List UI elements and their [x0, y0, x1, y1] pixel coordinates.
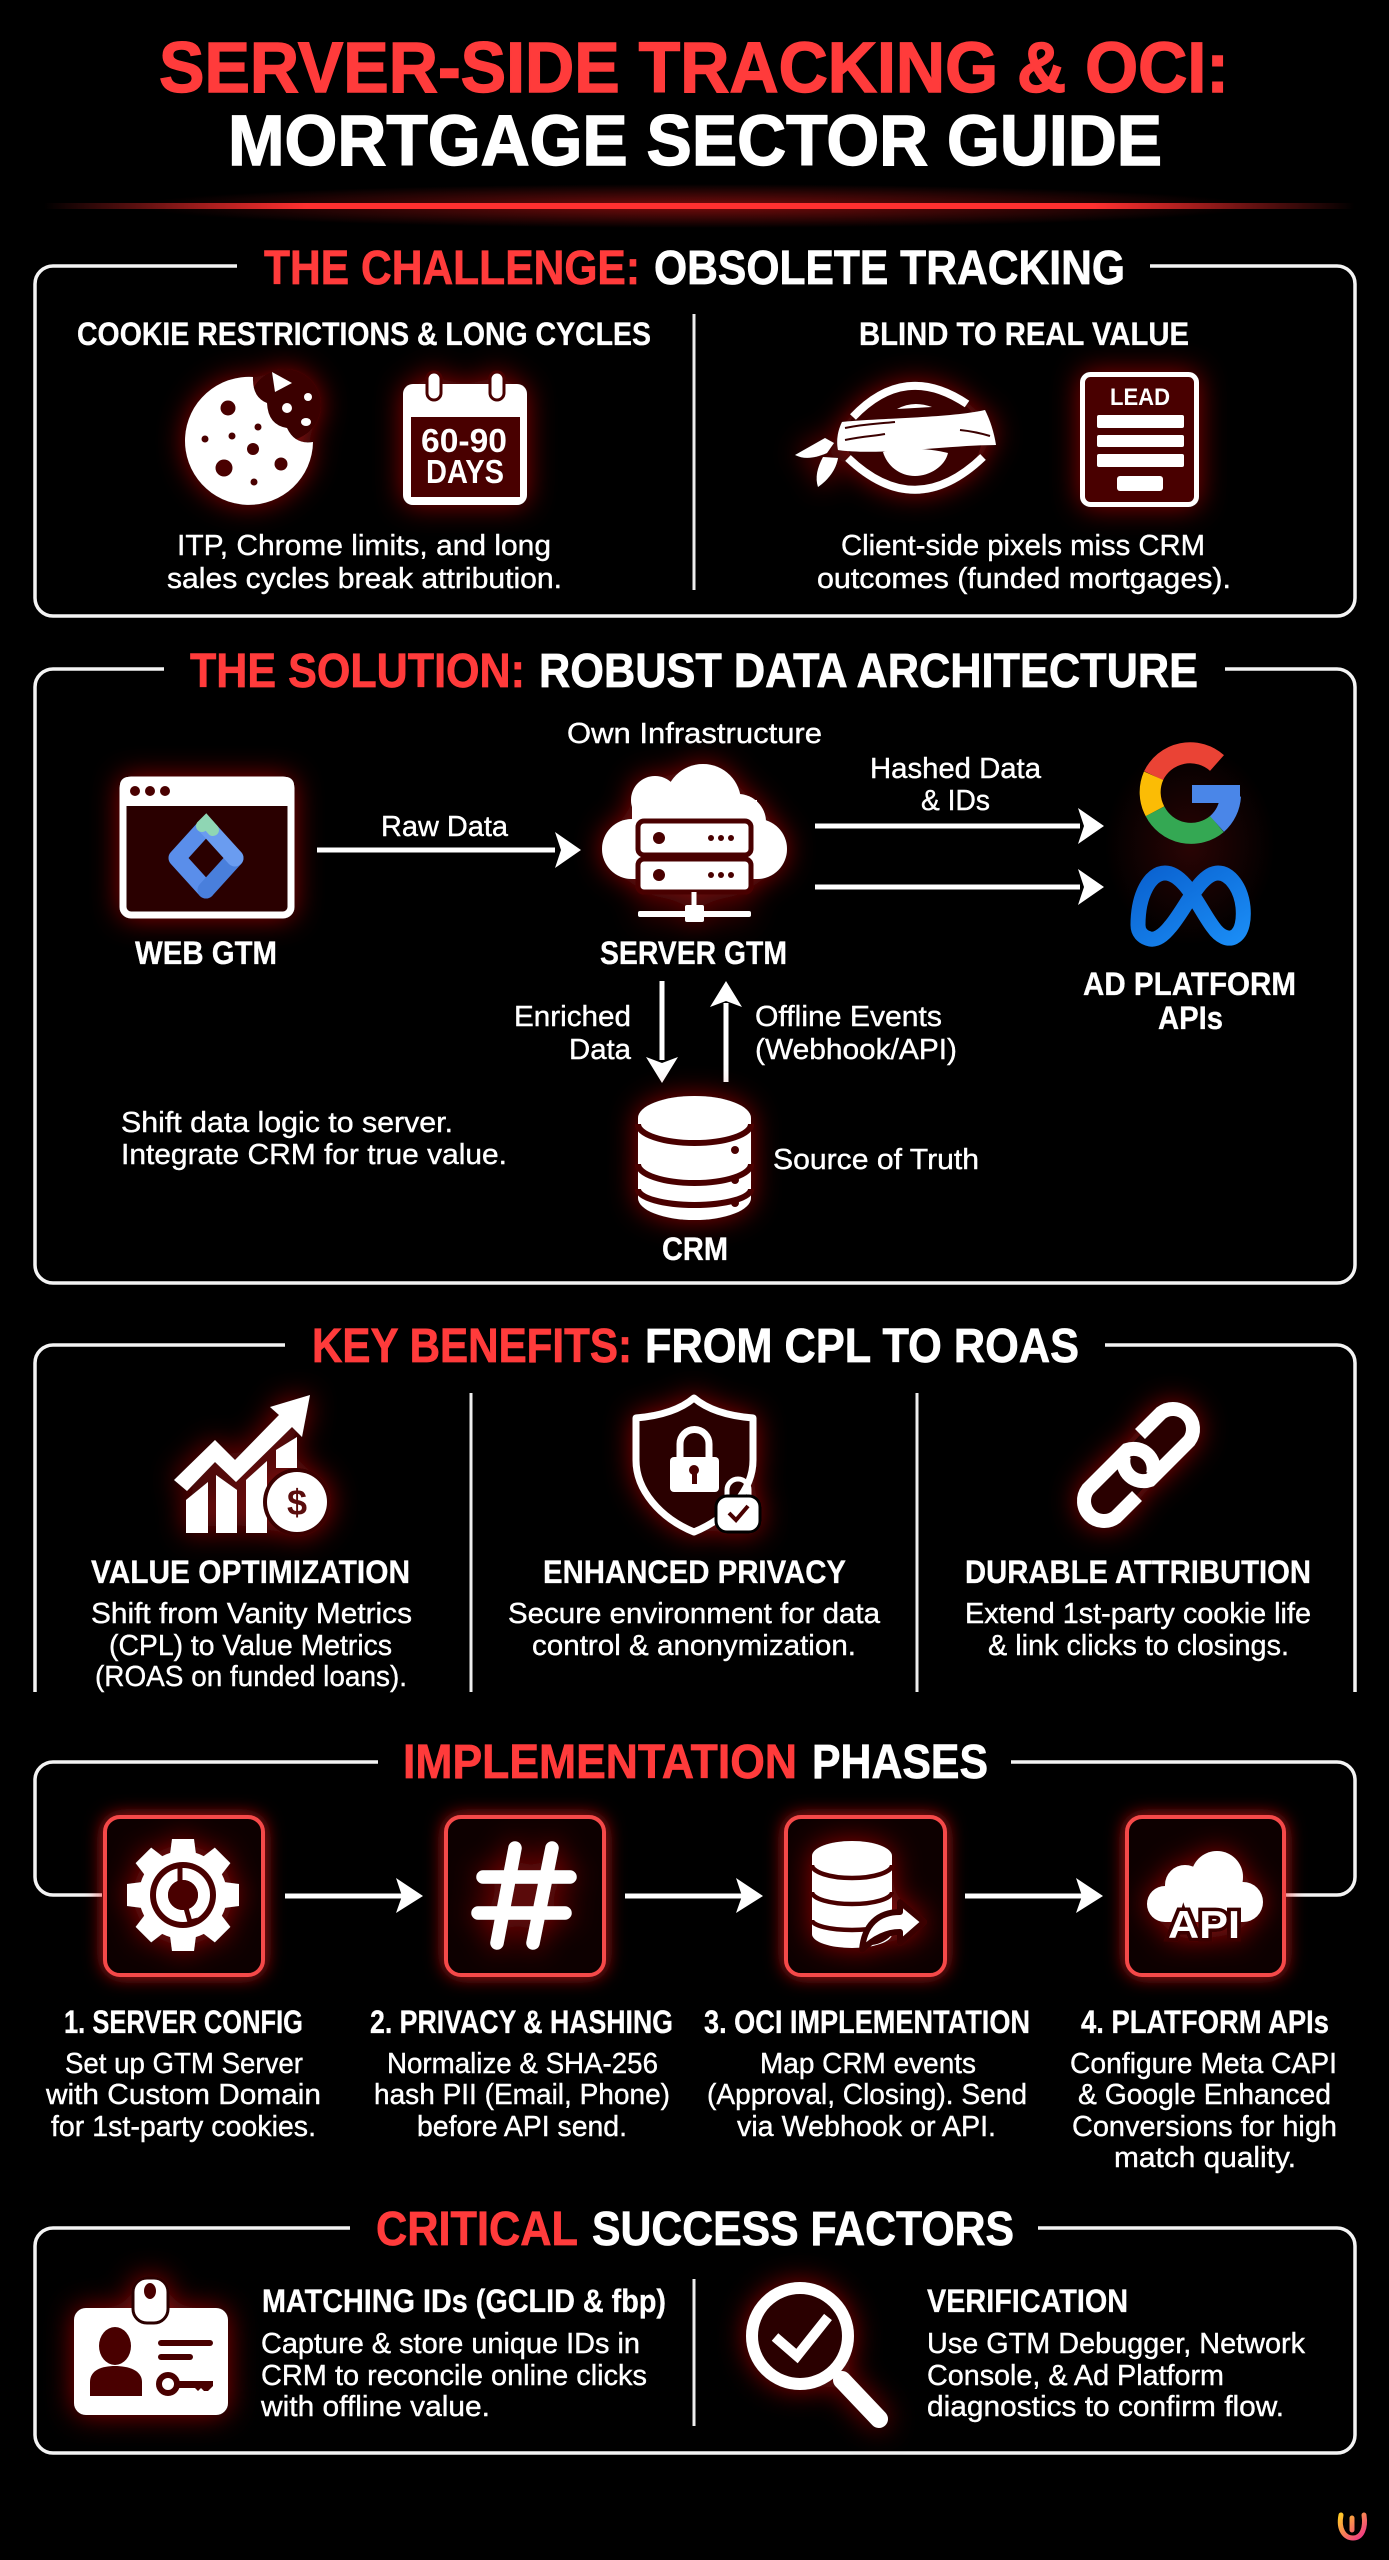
heading: critical success factors — [376, 2203, 1014, 2256]
text: phase 2: hash PII (Email, Phone) — [374, 2079, 670, 2111]
icon: gear — [127, 1839, 239, 1951]
label: web gtm: WEB GTM — [135, 935, 277, 971]
label: source of truth: Source of Truth — [773, 1144, 979, 1176]
icon: crm database — [638, 1096, 751, 1220]
text: durable attribution: DURABLE ATTRIBUTION — [965, 1554, 1311, 1590]
icon: id badge with key — [74, 2278, 228, 2415]
arrow: offline events: Offline Events — [755, 1001, 942, 1033]
text: challenge right description: outcomes (funded mortgages). — [817, 563, 1231, 595]
text: phase 4: & Google Enhanced — [1078, 2079, 1331, 2111]
arrow: enriched data — [514, 981, 678, 1083]
icon: blindfolded eye — [795, 386, 996, 490]
text: durable attribution: Extend 1st-party cookie life — [965, 1598, 1311, 1630]
text: challenge right description: Client-side pixels miss CRM — [841, 530, 1205, 562]
title: SERVER-SIDE TRACKING & OCI: — [159, 29, 1229, 108]
label: own infrastructure: Own Infrastructure — [567, 718, 822, 750]
heading: critical success factors: CRITICAL — [376, 2203, 578, 2256]
text: value optimization: (ROAS on funded loans). — [95, 1661, 407, 1693]
label: ad platform apis — [1083, 966, 1296, 1036]
text: challenge right description — [817, 530, 1231, 595]
label: ad platform apis: APIs — [1158, 1000, 1223, 1036]
arrow: phase 1 to 2 — [285, 1878, 423, 1913]
icon: meta logo — [1138, 873, 1243, 939]
text: phase 2: before API send. — [417, 2111, 627, 2143]
text: matching ids — [260, 2283, 666, 2423]
text: matching ids: MATCHING IDs (GCLID & fbp) — [262, 2283, 666, 2319]
arrow: hashed data to google — [815, 753, 1104, 844]
text: phase 1: 1. SERVER CONFIG — [64, 2004, 303, 2040]
text: challenge left description: sales cycles break attribution. — [167, 563, 562, 595]
arrow: raw data — [317, 811, 581, 868]
icon: privacy shield — [636, 1398, 760, 1532]
text: phase 3 — [704, 2004, 1030, 2143]
text: matching ids: CRM to reconcile online clicks — [261, 2360, 647, 2392]
heading: the challenge: THE CHALLENGE: — [264, 242, 640, 295]
arrow: data to meta — [815, 869, 1104, 905]
arrow: hashed data to google: Hashed Data — [870, 753, 1042, 785]
heading: the solution: ROBUST DATA ARCHITECTURE — [539, 645, 1198, 698]
text: phase 3: (Approval, Closing). Send — [707, 2079, 1027, 2111]
text: enhanced privacy: ENHANCED PRIVACY — [543, 1554, 846, 1590]
heading: the solution: THE SOLUTION: — [190, 645, 525, 698]
text: phase 1 — [45, 2004, 321, 2143]
icon: api cloud: API — [1168, 1904, 1240, 1947]
arrow: raw data: Raw Data — [381, 811, 509, 843]
arrow: offline events — [710, 981, 957, 1082]
icon: value growth chart — [174, 1395, 331, 1536]
text: phase 1: with Custom Domain — [45, 2079, 321, 2111]
icon: lead form — [1082, 374, 1196, 504]
text: value optimization — [91, 1554, 412, 1693]
icon: bitten cookie — [185, 369, 321, 505]
title — [159, 29, 1229, 181]
heading: the solution — [190, 645, 1198, 698]
text: shift data logic: Integrate CRM for true value. — [121, 1139, 507, 1171]
icon: chain link — [1084, 1409, 1193, 1521]
text: verification: VERIFICATION — [927, 2283, 1128, 2319]
icon: calendar 60-90 days — [403, 372, 527, 505]
text: phase 4: match quality. — [1114, 2142, 1296, 2174]
text: phase 1: for 1st-party cookies. — [51, 2111, 316, 2143]
text: challenge left description: ITP, Chrome limits, and long — [177, 530, 551, 562]
text: phase 4: 4. PLATFORM APIs — [1081, 2004, 1329, 2040]
arrow: offline events: (Webhook/API) — [755, 1034, 957, 1066]
icon: lead form: LEAD — [1110, 384, 1170, 411]
text: verification: Use GTM Debugger, Network — [927, 2328, 1305, 2360]
text: phase 2 — [370, 2004, 673, 2143]
text: verification: Console, & Ad Platform — [927, 2360, 1224, 2392]
subheading: blind to real value: BLIND TO REAL VALUE — [859, 316, 1189, 352]
icon: database with share arrow — [812, 1841, 924, 1950]
text: matching ids: Capture & store unique IDs in — [261, 2328, 640, 2360]
text: matching ids: with offline value. — [260, 2391, 490, 2423]
phase box: privacy and hashing — [446, 1817, 604, 1975]
heading: implementation phases: IMPLEMENTATION — [403, 1736, 797, 1789]
text: value optimization: Shift from Vanity Metrics — [91, 1598, 412, 1630]
text: phase 4: Configure Meta CAPI — [1070, 2048, 1337, 2080]
heading: key benefits: KEY BENEFITS: — [312, 1320, 632, 1373]
phase box: platform apis — [1127, 1817, 1284, 1975]
panel: implementation phases — [35, 1736, 1355, 2174]
heading: the challenge — [264, 242, 1125, 295]
label: server gtm: SERVER GTM — [600, 935, 787, 971]
panel: the solution — [35, 645, 1355, 1283]
icon: google logo — [1105, 745, 1275, 945]
icon: magnifier with check — [752, 2288, 879, 2419]
label: crm: CRM — [662, 1231, 728, 1267]
text: shift data logic: Shift data logic to server. — [121, 1107, 453, 1139]
text: enhanced privacy — [508, 1554, 881, 1662]
icon: calendar 60-90 days: DAYS — [426, 453, 504, 490]
text: enhanced privacy: control & anonymization. — [532, 1630, 856, 1662]
text: phase 3: 3. OCI IMPLEMENTATION — [704, 2004, 1030, 2040]
arrow: enriched data: Data — [569, 1034, 632, 1066]
text: phase 4: Conversions for high — [1072, 2111, 1337, 2143]
arrow: phase 3 to 4 — [965, 1878, 1103, 1913]
text: phase 2: Normalize & SHA-256 — [387, 2048, 658, 2080]
text: enhanced privacy: Secure environment for data — [508, 1598, 881, 1630]
text: phase 4 — [1070, 2004, 1337, 2174]
panel: critical success factors — [35, 2203, 1355, 2453]
text: phase 3: via Webhook or API. — [737, 2111, 996, 2143]
icon: calendar 60-90 days: 60-90 — [421, 422, 507, 459]
subheading: cookie restrictions: COOKIE RESTRICTIONS & LONG CYCLES — [77, 316, 651, 352]
text: phase 3: Map CRM events — [760, 2048, 976, 2080]
text: verification — [927, 2283, 1305, 2423]
text: value optimization: (CPL) to Value Metrics — [109, 1630, 392, 1662]
text: durable attribution: & link clicks to closings. — [988, 1630, 1289, 1662]
text: challenge left description — [167, 530, 562, 595]
title divider glow line — [44, 184, 1355, 228]
arrow: hashed data to google: & IDs — [921, 785, 990, 817]
arrow: phase 2 to 3 — [625, 1878, 763, 1913]
icon: web gtm browser — [120, 777, 294, 915]
label: ad platform apis: AD PLATFORM — [1083, 966, 1296, 1002]
phase box: server config — [105, 1817, 263, 1975]
text: value optimization: VALUE OPTIMIZATION — [91, 1554, 410, 1590]
panel: key benefits — [35, 1320, 1355, 1693]
panel: the challenge — [35, 242, 1355, 616]
icon: hash — [478, 1848, 570, 1943]
text: phase 1: Set up GTM Server — [65, 2048, 303, 2080]
heading: critical success factors: SUCCESS FACTORS — [592, 2203, 1014, 2256]
phase box: oci implementation — [786, 1817, 945, 1975]
icon: value growth chart: $ — [287, 1482, 307, 1523]
icon: corner logo — [1340, 2515, 1365, 2538]
arrow: enriched data: Enriched — [514, 1001, 631, 1033]
heading: implementation phases: PHASES — [812, 1736, 988, 1789]
heading: key benefits: FROM CPL TO ROAS — [645, 1320, 1079, 1373]
text: phase 2: 2. PRIVACY & HASHING — [370, 2004, 673, 2040]
icon: server gtm cloud — [602, 764, 787, 922]
text: verification: diagnostics to confirm flow. — [927, 2391, 1284, 2423]
heading: the challenge: OBSOLETE TRACKING — [654, 242, 1125, 295]
text: durable attribution — [965, 1554, 1311, 1662]
heading: key benefits — [312, 1320, 1079, 1373]
icon: api cloud — [1147, 1851, 1263, 1947]
text: shift data logic — [121, 1107, 507, 1171]
title: MORTGAGE SECTOR GUIDE — [228, 102, 1162, 181]
